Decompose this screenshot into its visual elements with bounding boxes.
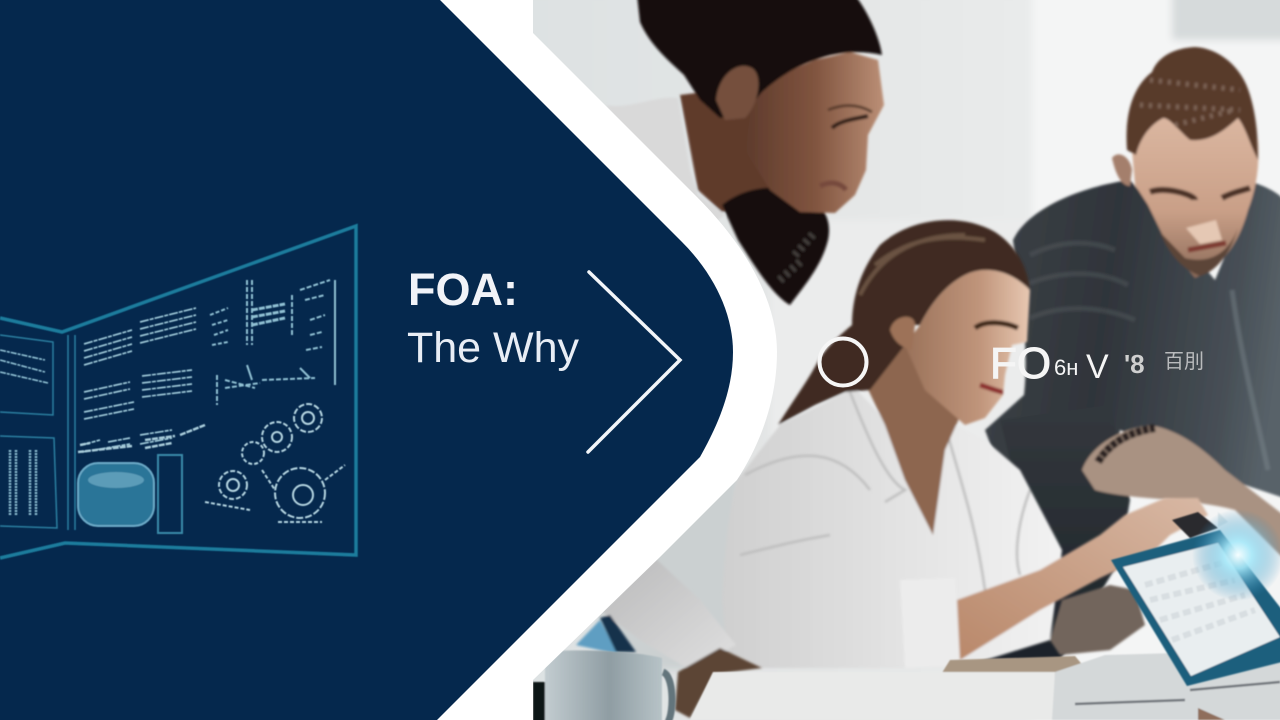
blueprint diagram (0, 226, 356, 558)
person: man at right (975, 47, 1280, 660)
subtitle: The Why: The Why (407, 324, 580, 372)
overlay label on photo: 百刖 (1164, 350, 1204, 373)
overlay label on photo (990, 339, 1204, 388)
person: woman in front (722, 220, 1208, 668)
ear (1112, 154, 1132, 186)
paper stack (690, 672, 1055, 720)
blueprint gears (205, 404, 345, 522)
face (745, 52, 884, 213)
title: FOA: FOA: (408, 264, 518, 315)
neck and chest (866, 345, 965, 535)
face (1132, 112, 1259, 278)
shirt folds (740, 392, 1030, 590)
blueprint narrow box (158, 455, 182, 533)
table and papers (533, 650, 1280, 720)
blueprint lower labels (78, 425, 205, 452)
sweater lower shadow (975, 405, 1130, 660)
mug (545, 650, 662, 720)
icon: tablet with glow (1111, 509, 1280, 686)
hair (778, 220, 1030, 425)
blueprint middle text columns (82, 308, 196, 452)
overlay label on photo: V (1086, 348, 1109, 386)
dark surface by mug (533, 682, 545, 720)
elbow behind arm (1050, 585, 1145, 655)
shirt (722, 388, 1062, 668)
person: woman at back (606, 0, 884, 305)
overlay label on photo: FO (990, 339, 1051, 388)
arrow: chevron (588, 272, 680, 452)
blueprint left page text (0, 350, 48, 515)
face (905, 270, 1030, 425)
blueprint frame (0, 226, 356, 558)
panel: navy arrow (0, 0, 733, 720)
features (832, 116, 868, 128)
photo: team reviewing a tablet (520, 0, 1280, 720)
white band around panel (430, 0, 777, 720)
sleeve and hand of back woman (576, 558, 762, 718)
hair (1127, 47, 1258, 160)
blueprint left page (0, 335, 75, 530)
icon: white ring (820, 338, 866, 386)
lower hair (722, 188, 829, 305)
photo background: office wall (520, 0, 1280, 720)
ear (716, 66, 758, 120)
overlay label on photo: '8 (1124, 349, 1145, 379)
shirt cuff (900, 578, 960, 668)
ear (890, 317, 915, 350)
neck (680, 85, 790, 212)
features (975, 323, 1018, 328)
collar (606, 98, 725, 240)
sweater (975, 180, 1280, 640)
tattooed forearm (1082, 425, 1280, 565)
overlay label on photo: 6н (1054, 355, 1078, 380)
arm (957, 498, 1208, 660)
hair (637, 0, 882, 118)
blueprint ellipse chart (78, 463, 154, 526)
blueprint right schematic (210, 280, 335, 405)
